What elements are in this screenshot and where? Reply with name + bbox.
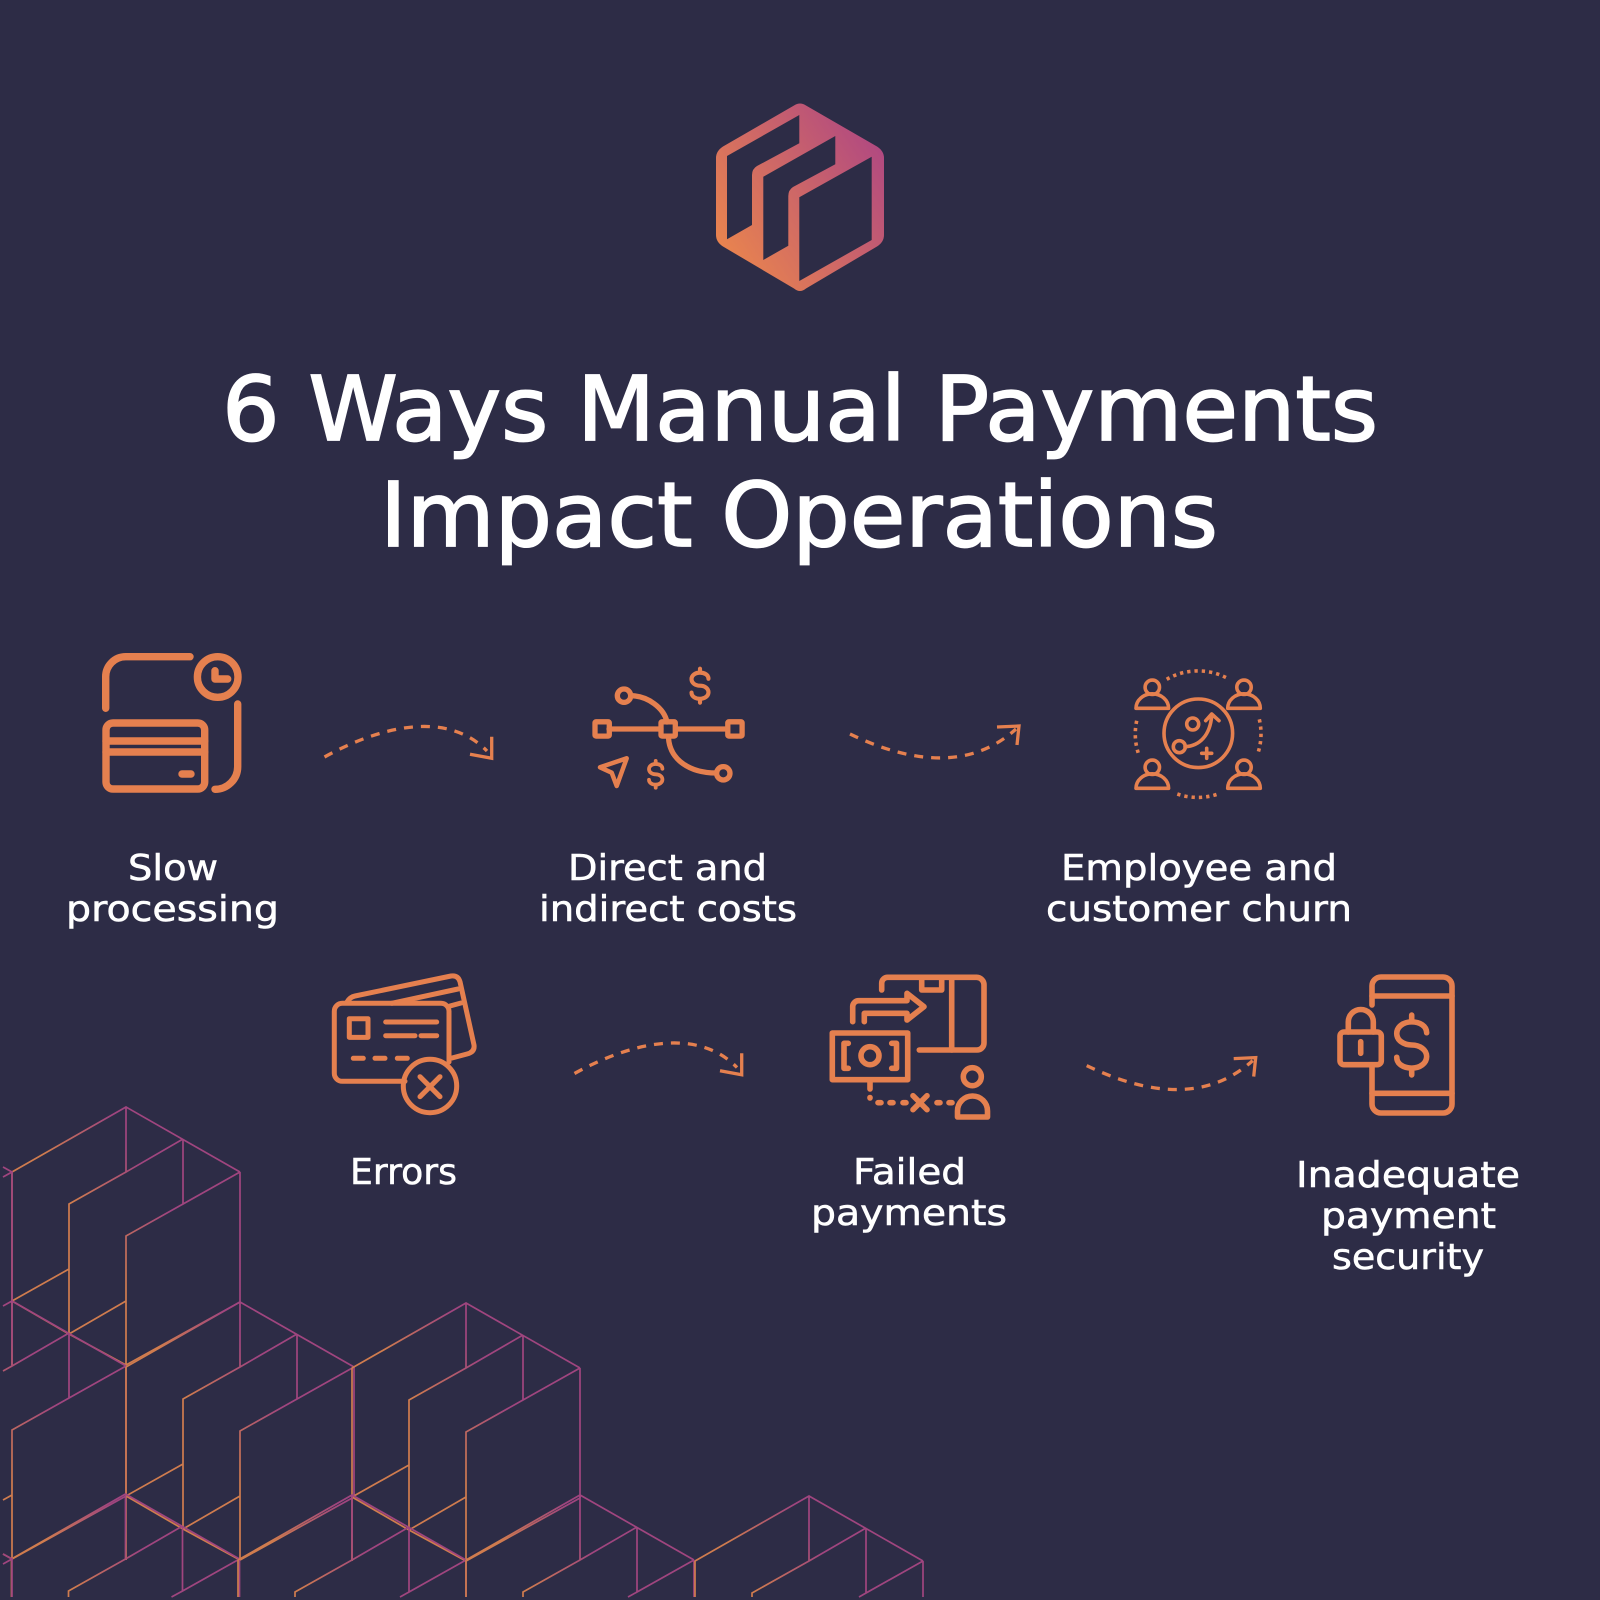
icon: people around strategy circle	[1135, 671, 1261, 797]
label: inadequate payment security: security	[1332, 1237, 1484, 1278]
icon: card with clock	[106, 657, 238, 789]
label: inadequate payment security: payment	[1321, 1196, 1496, 1237]
arrow 1	[324, 726, 492, 758]
label: slow processing	[66, 848, 279, 930]
title	[222, 357, 1378, 567]
label: errors: Errors	[350, 1152, 457, 1193]
label: slow processing: Slow	[128, 848, 218, 889]
icon: bezier curve with dollars	[595, 669, 742, 788]
label: inadequate payment security	[1296, 1155, 1520, 1278]
label: employee and customer churn: Employee and	[1061, 848, 1337, 889]
arrow 2	[850, 726, 1019, 758]
icon: cards with x	[334, 976, 474, 1113]
icon: money transfer failed	[832, 977, 988, 1117]
label: direct and indirect costs	[539, 848, 797, 930]
arrow 4	[1087, 1058, 1256, 1090]
title: 6 Ways Manual Payments	[222, 357, 1378, 461]
step 4: errors	[334, 976, 474, 1193]
step 3: employee and customer churn	[1046, 671, 1352, 930]
label: employee and customer churn: customer churn	[1046, 889, 1352, 930]
label: direct and indirect costs: Direct and	[568, 848, 767, 889]
label: direct and indirect costs: indirect costs	[539, 889, 797, 930]
label: slow processing: processing	[66, 889, 279, 930]
step 2: direct and indirect costs	[539, 669, 797, 930]
logo: hexagon mark	[716, 104, 884, 291]
label: inadequate payment security: Inadequate	[1296, 1155, 1520, 1196]
step 5: failed payments	[811, 977, 1007, 1234]
label: failed payments: payments	[811, 1193, 1007, 1234]
label: failed payments	[811, 1152, 1007, 1234]
arrow 3	[574, 1043, 742, 1075]
icon: phone with lock and dollar	[1340, 977, 1452, 1113]
title: Impact Operations	[380, 463, 1218, 567]
background isometric line pattern	[3, 1107, 923, 1597]
step 1: slow processing	[66, 657, 279, 930]
label: employee and customer churn	[1046, 848, 1352, 930]
step 6: inadequate payment security	[1296, 977, 1520, 1278]
label: failed payments: Failed	[853, 1152, 966, 1193]
